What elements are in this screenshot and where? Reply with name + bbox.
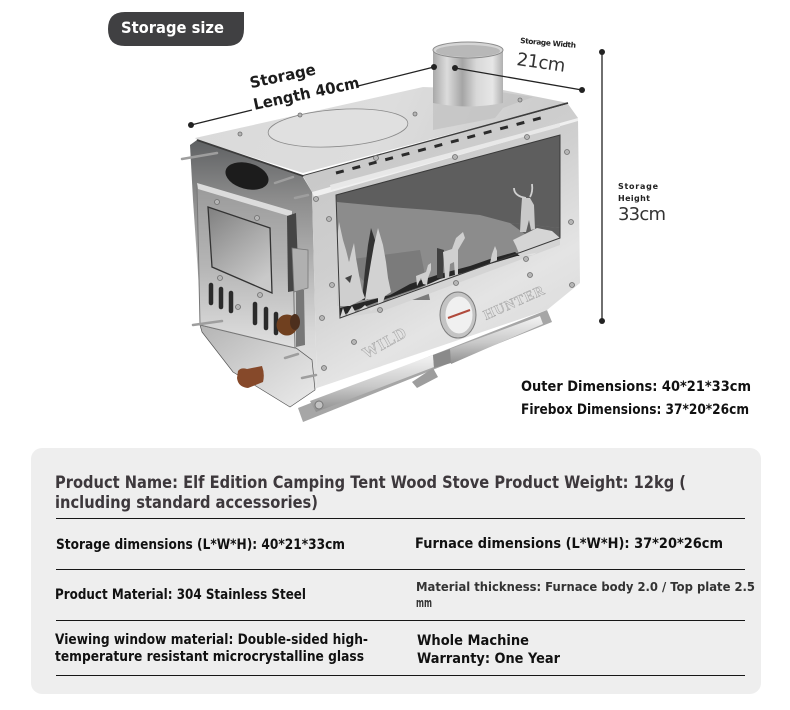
heading: product name: Product Name: Elf Edition Camping Tent Wood Stove Product Weight: 12kg (	[55, 473, 686, 492]
protruding bolts	[182, 153, 316, 378]
deer small	[416, 263, 431, 286]
heading: product name: including standard accessories)	[55, 493, 318, 512]
badge: Storage size	[108, 12, 244, 46]
dimension line: storage width	[452, 36, 585, 93]
embossed lettering: HUNTER	[482, 283, 548, 324]
viewing window	[336, 135, 560, 318]
label: storage width: Storage Width	[520, 36, 576, 50]
spec: furnace dimensions: Furnace dimensions (L*W*H): 37*20*26cm	[415, 536, 723, 552]
trees	[337, 222, 365, 306]
stove door	[197, 183, 308, 348]
badge: Storage size: Storage size	[121, 18, 224, 37]
dark ground band	[340, 252, 520, 316]
embossed lettering	[360, 283, 548, 362]
left face	[190, 140, 317, 407]
rock	[513, 228, 560, 256]
door glass	[208, 207, 272, 293]
outer and firebox dimensions	[521, 379, 751, 418]
dimension line: storage height	[599, 49, 666, 324]
panel coloured ground	[340, 238, 560, 318]
dimension line: storage length	[188, 52, 437, 128]
label: storage width	[515, 36, 576, 77]
label: storage length: Length 40cm	[252, 74, 361, 114]
bright edge strip	[312, 118, 578, 197]
top plate	[195, 87, 568, 176]
heading: product name	[55, 473, 686, 512]
label: storage length	[247, 52, 361, 114]
spec: warranty: Whole Machine	[417, 633, 529, 649]
spec: warranty	[417, 633, 561, 667]
spec: viewing window material: temperature resistant microcrystalline glass	[55, 649, 364, 665]
vent oval	[222, 158, 272, 194]
door hinge	[292, 248, 308, 292]
stove illustration	[182, 42, 580, 422]
label: storage length: Storage	[248, 61, 317, 92]
lower wooden knob	[237, 366, 264, 388]
dark tree	[362, 228, 375, 300]
spec: material thickness: Material thickness: Furnace body 2.0 / Top plate 2.5	[416, 580, 755, 594]
label: storage height: Storage	[618, 182, 659, 191]
deer large	[514, 184, 535, 232]
spec: viewing window material	[55, 632, 368, 665]
label: storage width: 21cm	[515, 49, 567, 77]
side panel	[303, 104, 580, 388]
lower plate	[200, 325, 315, 407]
spec: viewing window material: Viewing window material: Double-sided high-	[55, 632, 368, 648]
spec: material thickness	[416, 580, 755, 610]
slot row	[336, 116, 548, 173]
deer middle	[437, 232, 465, 278]
label: storage height	[618, 182, 666, 225]
label: storage height: 33cm	[618, 204, 666, 225]
panel bolts	[214, 98, 574, 370]
chimney	[433, 42, 503, 106]
door knob	[276, 314, 300, 336]
panel: product specifications	[31, 448, 761, 694]
outer and firebox dimensions: Outer Dimensions: 40*21*33cm	[521, 379, 751, 395]
spec: storage dimensions: Storage dimensions (L*W*H): 40*21*33cm	[56, 537, 345, 553]
outer and firebox dimensions: Firebox Dimensions: 37*20*26cm	[521, 402, 749, 418]
spec: warranty: Warranty: One Year	[417, 651, 561, 667]
base stand	[298, 310, 552, 422]
embossed lettering: WILD	[360, 324, 410, 362]
door air slots	[211, 285, 276, 333]
spec: material thickness: mm	[416, 596, 432, 610]
temperature gauge	[440, 292, 476, 338]
label: storage height: Height	[618, 194, 650, 203]
spec: product material: Product Material: 304 Stainless Steel	[55, 587, 306, 603]
